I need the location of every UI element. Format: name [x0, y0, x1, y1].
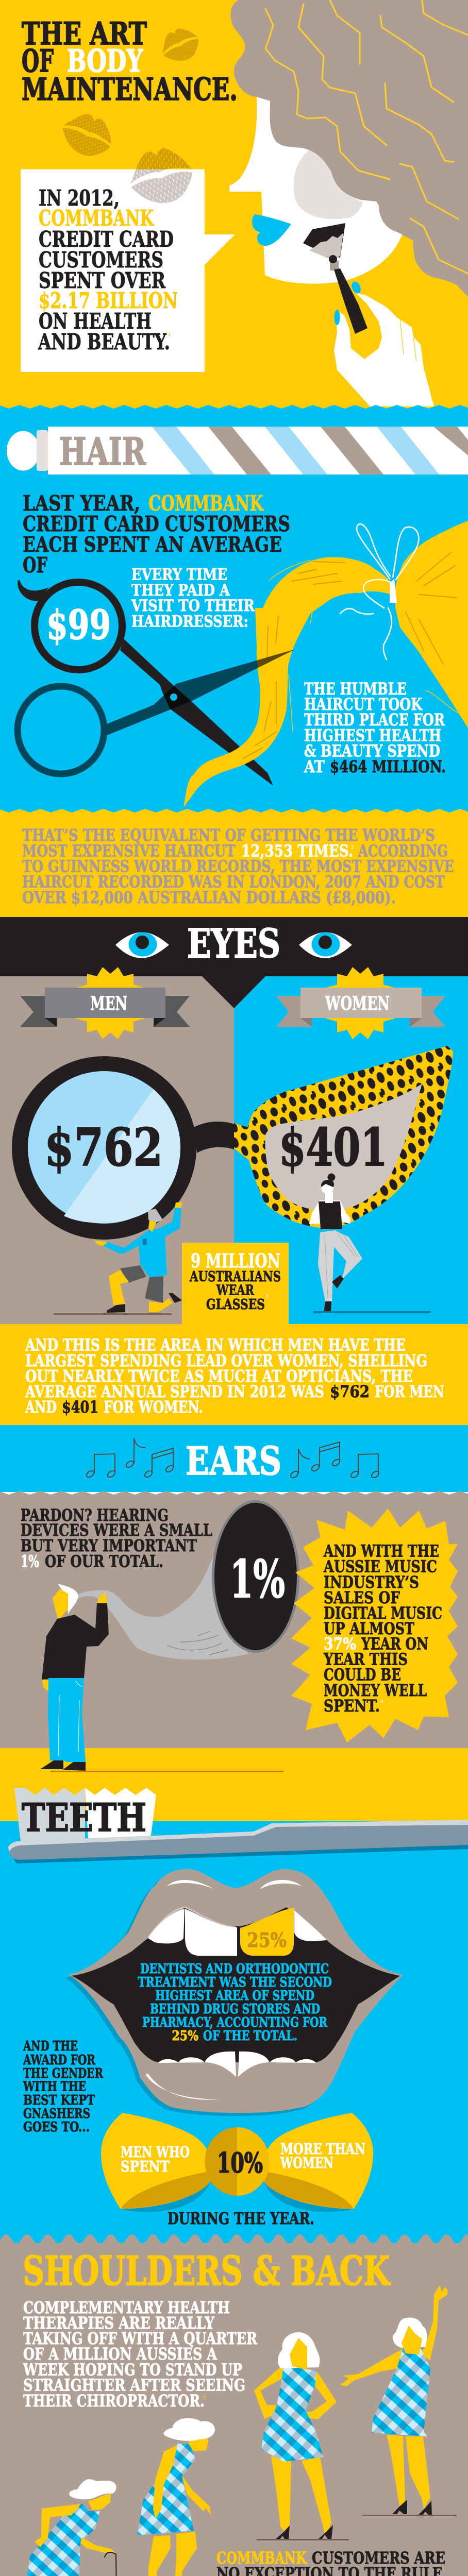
illustration: bow tie: SPENT — [121, 2158, 170, 2175]
text inside mouth: TREATMENT WAS THE SECOND — [138, 1975, 332, 1990]
illustration: toothbrush with teeth heading — [8, 1788, 468, 1863]
heading: eyes: EYES — [187, 921, 280, 967]
text: hair average spend: HAIRDRESSER: — [131, 612, 248, 631]
gold tooth label: 25% — [247, 1928, 287, 1952]
upper teeth — [148, 1908, 327, 1956]
illustration: open mouth — [65, 1869, 403, 2116]
illustration: bow tie: 10% — [217, 2147, 263, 2179]
lip highlights — [145, 1880, 302, 2100]
illustration: man holding glasses — [54, 1202, 182, 1315]
illustration: bow tie: MEN WHO — [121, 2143, 190, 2161]
illustration: women's cat-eye glasses — [234, 1046, 453, 1228]
starburst: digital music: 4 — [380, 1699, 383, 1705]
blue lips — [252, 214, 291, 246]
text: complementary health: 5 — [203, 2395, 206, 2401]
text: during the year: DURING THE YEAR. — [168, 2209, 314, 2228]
text: spending lead: FOR WOMEN. — [104, 1397, 203, 1417]
eye icon right — [299, 933, 352, 958]
text: humble haircut: THE HUMBLE — [304, 679, 407, 699]
callout: 2012 spend speech bubble: IN 2012, — [39, 185, 120, 211]
section: world's most expensive haircut: MOST EXPENSIVE HAIRCUT — [22, 841, 236, 860]
illustration: bow tie — [101, 2113, 373, 2212]
title: MAINTENANCE. — [22, 72, 238, 108]
illustration: woman with raised arm — [340, 2285, 457, 2516]
text: complementary health: OF A MILLION AUSSIES A — [23, 2344, 218, 2364]
title: OF — [22, 43, 54, 79]
hair strands — [265, 0, 468, 274]
section: world's most expensive haircut — [0, 809, 468, 917]
title: THE ART — [22, 16, 147, 52]
section: world's most expensive haircut: 2 — [351, 844, 354, 851]
illustration: woman in glasses — [309, 1174, 431, 1313]
text: best kept gnashers: AWARD FOR — [23, 2053, 95, 2068]
illustration: ear trumpet — [69, 1500, 299, 1659]
stat box: 9 million Australians wear glasses: WEAR — [216, 1283, 254, 1298]
text: complementary health: STRAIGHTER AFTER SEEING — [23, 2376, 245, 2395]
text: hair average spend — [23, 491, 290, 631]
heading: ears: EARS — [186, 1438, 281, 1484]
text: hearing devices: DEVICES WERE A SMALL — [21, 1520, 212, 1540]
text: commbank chiropractor spend: COMMBANK — [216, 2548, 307, 2568]
callout: 2012 spend speech bubble: 1 — [168, 332, 171, 337]
badge: men — [20, 967, 190, 1039]
text inside mouth: OF THE TOTAL. — [203, 2028, 297, 2044]
callout: 2012 spend speech bubble: $2.17 BILLION — [39, 288, 178, 313]
text: spending lead: FOR MEN — [375, 1382, 444, 1401]
stat box: 9 million Australians wear glasses: GLASSES — [206, 1297, 265, 1313]
badge: women — [276, 967, 445, 1039]
text: best kept gnashers: WITH THE — [23, 2079, 86, 2095]
text: complementary health — [23, 2298, 257, 2411]
icon: music notes — [86, 1438, 380, 1479]
text: hair average spend: EACH SPENT AN AVERAGE — [23, 532, 282, 557]
callout: 2012 spend speech bubble: CREDIT CARD — [39, 227, 174, 252]
section: ears header — [0, 1425, 468, 1492]
callout: 2012 spend speech bubble: COMMBANK — [39, 206, 154, 231]
text: hair average spend: EVERY TIME — [131, 566, 227, 584]
hand — [334, 293, 434, 406]
text: spending lead: AVERAGE ANNUAL SPEND IN 2012 WAS — [25, 1382, 324, 1401]
text inside mouth — [138, 1961, 332, 2044]
title — [22, 16, 238, 108]
text: complementary health: THEIR CHIROPRACTOR. — [23, 2391, 205, 2411]
lipstick kisses — [56, 22, 205, 163]
text inside mouth: 25% — [172, 2028, 198, 2044]
callout: 2012 spend speech bubble: ON HEALTH — [39, 309, 152, 334]
section: world's most expensive haircut: 12,353 TIMES. — [241, 841, 353, 860]
text: spending lead: $401 — [62, 1397, 98, 1417]
stat box: 9 million Australians wear glasses — [182, 1243, 289, 1324]
text: hair average spend: LAST YEAR, — [23, 491, 140, 516]
text: best kept gnashers: AND THE — [23, 2039, 78, 2054]
text: spending lead — [0, 1324, 468, 1425]
section: intro background — [0, 0, 468, 409]
illustration: translucent scissor blade — [18, 649, 295, 774]
starburst: digital music — [291, 1509, 458, 1742]
text inside mouth: BEHIND DRUG STORES AND — [150, 2002, 320, 2017]
text: spending lead: $762 — [330, 1382, 370, 1401]
kiss overlapping the bubble — [130, 148, 193, 203]
illustration: ponytail — [183, 521, 468, 807]
starburst: digital music: MONEY WELL — [324, 1681, 427, 1700]
text: hearing devices: 1% — [21, 1551, 39, 1571]
section: eyes header — [0, 917, 468, 1324]
starburst: digital music: SPENT. — [324, 1696, 380, 1716]
section: ears background — [0, 1491, 468, 1821]
stat box: 9 million Australians wear glasses: 3 — [265, 1294, 269, 1300]
callout: 2012 spend speech bubble: SPENT OVER — [39, 268, 166, 293]
scissor pivot — [170, 693, 177, 701]
badge: women: WOMEN — [325, 993, 390, 1014]
text: hearing devices — [21, 1505, 212, 1571]
text inside mouth: DENTISTS AND ORTHODONTIC — [140, 1961, 329, 1977]
illustration: bow tie: WOMEN — [280, 2154, 333, 2172]
illustration: men's glasses: $762 — [44, 1117, 163, 1178]
text: hair average spend: COMMBANK — [148, 491, 264, 516]
illustration: scissors — [18, 580, 273, 786]
callout: 2012 spend speech bubble: AND BEAUTY. — [38, 329, 170, 354]
illustration: women's cat-eye glasses: $401 — [279, 1117, 388, 1178]
text inside mouth: PHARMACY, ACCOUNTING FOR — [142, 2015, 327, 2030]
amount: 99 dollars: $99 — [46, 602, 111, 649]
illustration: woman with cane — [25, 2479, 120, 2576]
section: teeth background — [0, 1821, 468, 2244]
text: best kept gnashers: GOES TO... — [23, 2120, 90, 2135]
text: humble haircut: HAIRCUT TOOK — [304, 694, 423, 714]
text: hair average spend: VISIT TO THEIR — [131, 597, 255, 615]
illustration: woman applying make-up — [229, 0, 468, 406]
text: hair average spend: CREDIT CARD CUSTOMERS — [23, 512, 290, 536]
starburst: digital music: COULD BE — [324, 1665, 401, 1685]
make-up brush — [303, 223, 345, 270]
title: BODY — [67, 43, 143, 79]
starburst: digital music: AND WITH THE — [323, 1541, 439, 1561]
starburst: digital music: UP ALMOST — [324, 1619, 414, 1638]
text: best kept gnashers: THE GENDER — [23, 2066, 103, 2081]
section: shoulders and back background — [0, 2234, 468, 2576]
section: world's most expensive haircut: OVER $12,000 AUSTRALIAN DOLLARS (£8,000). — [22, 888, 396, 907]
text: best kept gnashers: GNASHERS — [23, 2106, 90, 2122]
text: best kept gnashers: BEST KEPT — [23, 2093, 95, 2108]
text: hearing devices: OF OUR TOTAL. — [45, 1551, 163, 1571]
starburst: digital music: YEAR THIS — [323, 1650, 408, 1669]
illustration: stooping woman — [134, 2418, 215, 2576]
hair — [230, 0, 468, 297]
starburst: digital music: 37% — [324, 1634, 356, 1654]
text: commbank chiropractor spend — [216, 2548, 447, 2576]
starburst: digital music: YEAR ON — [361, 1634, 428, 1654]
illustration: woman with hands on hips — [254, 2332, 349, 2540]
stat box: 9 million Australians wear glasses: AUSTRALIANS — [189, 1269, 281, 1285]
text: complementary health: COMPLEMENTARY HEALTH — [23, 2298, 230, 2317]
starburst: digital music: SALES OF — [324, 1588, 400, 1607]
callout: 2012 spend speech bubble — [21, 142, 235, 372]
eye icon left — [115, 933, 169, 958]
face — [229, 97, 405, 284]
lower teeth — [158, 2052, 316, 2077]
text: humble haircut — [304, 679, 446, 776]
text: humble haircut: AT — [304, 757, 325, 776]
text: hearing devices: BUT VERY IMPORTANT — [21, 1536, 197, 1555]
stat box: 9 million Australians wear glasses: 9 MILLION — [191, 1249, 280, 1272]
callout: 2012 spend speech bubble: CUSTOMERS — [39, 247, 163, 273]
section: hair background — [0, 409, 468, 812]
illustration: men's glasses — [12, 1056, 234, 1240]
banner: hair barber pole — [7, 427, 468, 474]
text: hearing devices: PARDON? HEARING — [21, 1505, 169, 1525]
banner: hair barber pole: HAIR — [59, 430, 146, 474]
illustration: man with ear trumpet — [40, 1584, 283, 1772]
illustration: toothbrush with teeth heading: TEETH — [22, 1795, 146, 1840]
text: best kept gnashers — [23, 2039, 103, 2135]
text: complementary health: WEEK HOPING TO STAND UP — [23, 2360, 242, 2379]
text: complementary health: TAKING OFF WITH A QUARTER — [23, 2329, 257, 2348]
blush — [294, 150, 362, 219]
text inside mouth: HIGHEST AREA OF SPEND — [155, 1988, 314, 2004]
starburst: digital music: AUSSIE MUSIC — [323, 1557, 437, 1577]
badge: men: MEN — [90, 993, 127, 1014]
text: hair average spend: THEY PAID A — [131, 581, 230, 600]
starburst: digital music: INDUSTRY’S — [324, 1572, 419, 1592]
text: hair average spend: OF — [23, 553, 47, 578]
text: complementary health: THERAPIES ARE REALLY — [23, 2313, 215, 2333]
illustration: ear trumpet: 1% — [230, 1549, 285, 1609]
text: spending lead: AND — [25, 1397, 57, 1417]
illustration: bow tie: MORE THAN — [280, 2140, 365, 2158]
